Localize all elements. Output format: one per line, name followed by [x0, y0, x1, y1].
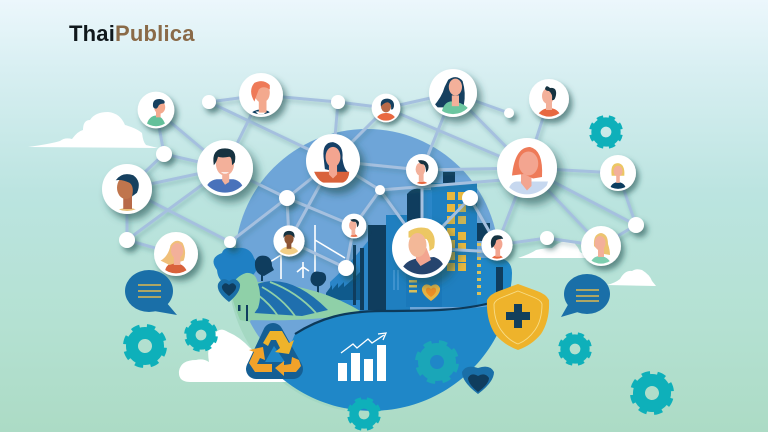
tree: green — [230, 273, 260, 322]
icon: speech bubble right — [561, 274, 610, 317]
icon: heart bottom — [462, 367, 494, 394]
icon: gear right top — [589, 115, 623, 149]
building: dark right — [477, 223, 490, 241]
icon: gear right middle — [558, 332, 592, 366]
building: dark top block — [443, 172, 455, 184]
dark window strip — [496, 267, 503, 293]
person 4: long-haired woman — [429, 69, 477, 117]
logo: ThaiPublica: ThaiPublica — [69, 21, 195, 46]
cloud: upper left — [28, 112, 158, 148]
person 10: red-haired woman large — [497, 138, 557, 198]
building: main tower — [406, 183, 477, 307]
icon: gear left large — [124, 325, 166, 367]
building: blue left — [386, 215, 410, 310]
building: low right blue — [440, 258, 512, 307]
field stripes — [253, 281, 328, 316]
cloud: small right — [607, 269, 656, 286]
small windows — [409, 243, 481, 295]
cloud: lower left — [179, 330, 300, 382]
person 14: man tiny — [342, 214, 366, 238]
wind turbines — [270, 225, 345, 279]
person 9: man small — [406, 154, 438, 186]
network junction dots — [119, 95, 644, 276]
person 17: blonde woman green top — [581, 226, 621, 266]
person 2: red-haired woman — [239, 73, 283, 117]
person 3: dark-haired woman small — [372, 94, 400, 122]
building: narrow dark — [353, 245, 364, 310]
icon: gear right bottom — [629, 370, 675, 416]
tower windows — [447, 192, 466, 271]
icon: bar chart with rising arrow — [338, 333, 386, 381]
icon: recycling — [249, 331, 301, 376]
tree: blue — [213, 248, 257, 284]
hill: green — [232, 282, 362, 320]
tree: dark left — [255, 256, 274, 281]
person 15: blond man large — [392, 218, 452, 278]
icon: shield with plus — [487, 284, 549, 350]
tree: dark right — [310, 272, 326, 294]
lower globe: blue ground — [278, 303, 509, 411]
icon: gear on globe — [416, 341, 458, 383]
person 16: man dark hair — [481, 229, 513, 261]
person 1: green shirt man — [138, 92, 174, 128]
city houses dark — [326, 270, 362, 300]
person 11: blonde woman small — [600, 155, 636, 191]
building: dark tower — [407, 189, 423, 222]
person 12: blonde woman red top — [154, 232, 198, 276]
network lines — [127, 93, 636, 268]
heart: on building — [422, 284, 440, 301]
ground dark line — [295, 303, 490, 334]
icon: speech bubble left — [125, 270, 177, 315]
person 13: smiling man yellow shirt — [273, 225, 305, 257]
person 6: smiling man blue shirt — [197, 140, 253, 196]
person 5: man with orange shirt — [529, 79, 569, 119]
icon: gear bottom center — [347, 397, 381, 431]
hill behind city — [330, 236, 400, 312]
globe illustration — [179, 127, 514, 413]
person 8: dark-skinned man — [102, 164, 152, 214]
building: dark staircase — [368, 225, 386, 310]
heart: on tree — [218, 279, 240, 302]
icon: gear left small — [185, 319, 217, 351]
cloud: behind right people — [518, 241, 590, 258]
person 7: woman red top — [306, 134, 360, 188]
globe sky — [235, 129, 499, 393]
globe green rim — [232, 299, 345, 410]
